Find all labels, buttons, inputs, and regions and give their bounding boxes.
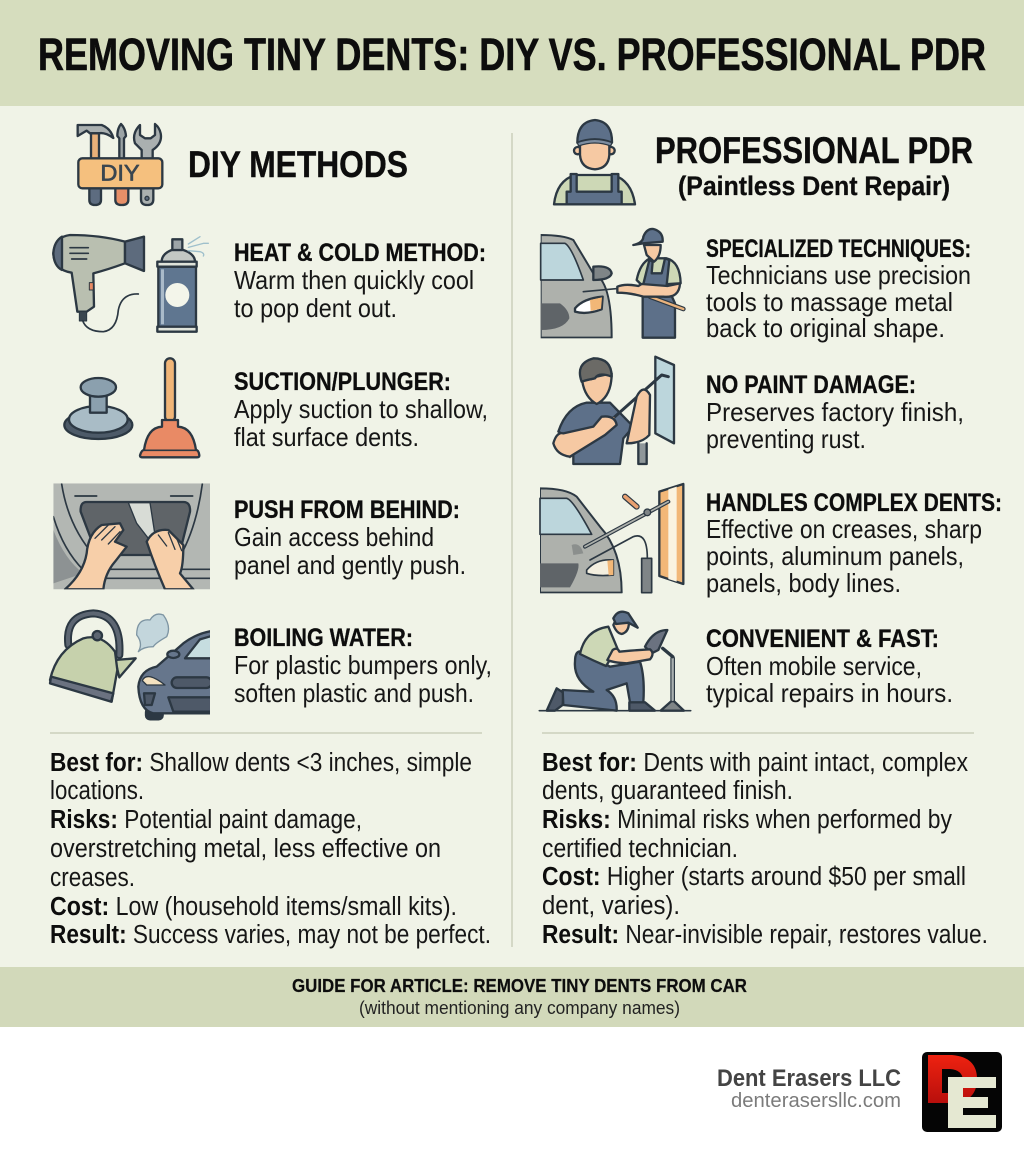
description: Apply suction to shallow, — [234, 394, 488, 424]
summary: professional PDR — [542, 749, 988, 949]
brand name and URL — [717, 1065, 901, 1112]
description: Gain access behind — [234, 522, 434, 552]
icon: DIY tool holder: DIY — [100, 161, 140, 186]
icon: kettle and car — [50, 613, 212, 719]
item: suction and plunger: flat surface dents. — [234, 422, 419, 452]
item: heat and cold method — [53, 235, 486, 332]
icon: hands pushing panel — [53, 483, 210, 589]
heading: professional PDR: PROFESSIONAL PDR — [655, 130, 973, 171]
item: handles complex dents: panels, body lines. — [706, 568, 901, 598]
description: Often mobile service, — [706, 651, 922, 681]
icon: car with rods and panel — [538, 484, 683, 595]
heading: NO PAINT DAMAGE: — [706, 371, 916, 399]
description: Warm then quickly cool — [234, 265, 474, 295]
footer band — [0, 967, 1024, 1027]
description: For plastic bumpers only, — [234, 650, 492, 680]
heading: CONVENIENT & FAST: — [706, 625, 939, 653]
item: push from behind: panel and gently push. — [234, 550, 466, 580]
heading: DIY methods: DIY METHODS — [188, 144, 408, 185]
heading: HEAT & COLD METHOD: — [234, 239, 486, 267]
summary: professional PDR: certified technician. — [542, 835, 738, 863]
icon: technician portrait — [554, 120, 635, 204]
summary: professional PDR: Result: Near-invisible repair, restores value. — [542, 921, 988, 949]
item: convenient and fast — [539, 612, 953, 711]
heading: SUCTION/PLUNGER: — [234, 368, 451, 396]
icon: technician with tool and panel — [553, 357, 674, 464]
item: handles complex dents: points, aluminum panels, — [706, 541, 964, 571]
footer band: GUIDE FOR ARTICLE: REMOVE TINY DENTS FROM CAR — [292, 975, 747, 996]
description: Technicians use precision — [706, 260, 971, 290]
summary: professional PDR: dents, guaranteed finish. — [542, 777, 793, 805]
summary: professional PDR: Cost: Higher (starts around $50 per small — [542, 863, 966, 891]
icon: kneeling technician — [539, 612, 691, 711]
icon: suction cup and plunger — [64, 358, 199, 457]
description: Preserves factory finish, — [706, 397, 964, 427]
item: specialized techniques: tools to massage metal — [706, 287, 953, 317]
item: heat and cold method: to pop dent out. — [234, 293, 397, 323]
item: boiling water — [50, 613, 492, 719]
summary: DIY: Risks: Potential paint damage, — [50, 806, 362, 834]
item: specialized techniques — [539, 229, 971, 343]
item: no paint damage — [553, 357, 964, 464]
item: handles complex dents — [538, 484, 1002, 598]
brand name and URL: denterasersllc.com — [731, 1090, 901, 1112]
item: push from behind — [53, 483, 466, 589]
summary: DIY: Cost: Low (household items/small kits). — [50, 893, 457, 921]
item: specialized techniques: back to original shape. — [706, 313, 945, 343]
summary: professional PDR: Best for: Dents with paint intact, complex — [542, 749, 968, 777]
summary: professional PDR: Risks: Minimal risks when performed by — [542, 806, 952, 834]
heading: PUSH FROM BEHIND: — [234, 496, 460, 524]
description: Effective on creases, sharp — [706, 514, 982, 544]
heading: BOILING WATER: — [234, 624, 413, 652]
summary: DIY: Best for: Shallow dents <3 inches, simple — [50, 749, 472, 777]
panel: DIY methods — [50, 124, 492, 949]
heading: professional PDR — [655, 130, 973, 201]
brand name and URL: Dent Erasers LLC — [717, 1065, 901, 1092]
logo — [922, 1052, 1002, 1132]
icon: hair dryer and spray can — [53, 235, 208, 332]
item: convenient and fast: typical repairs in hours. — [706, 678, 953, 708]
header band with title — [0, 0, 1024, 106]
summary: professional PDR: dent, varies). — [542, 892, 680, 920]
icon: DIY tool holder — [78, 124, 162, 205]
item: boiling water: soften plastic and push. — [234, 678, 474, 708]
summary: DIY: overstretching metal, less effective on — [50, 835, 441, 863]
item: suction and plunger — [64, 358, 488, 457]
panel: professional PDR — [538, 120, 1002, 949]
item: no paint damage: preventing rust. — [706, 424, 866, 454]
heading: professional PDR: (Paintless Dent Repair) — [678, 171, 950, 201]
footer band: (without mentioning any company names) — [359, 998, 680, 1018]
summary: DIY: Result: Success varies, may not be perfect. — [50, 921, 491, 949]
icon: technician working on car — [539, 229, 683, 340]
summary: DIY: locations. — [50, 777, 144, 805]
summary: DIY — [50, 749, 491, 949]
summary: DIY: creases. — [50, 864, 135, 892]
